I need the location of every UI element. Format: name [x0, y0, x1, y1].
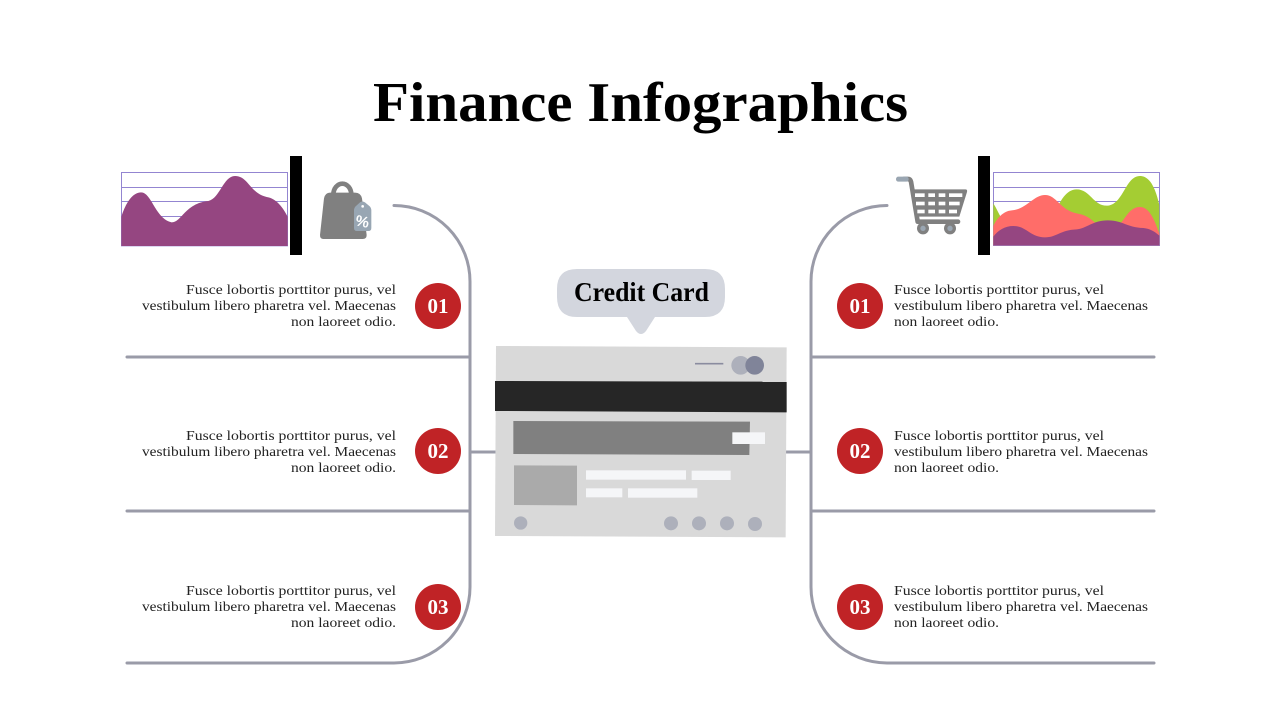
- right item 01 text: vestibulum libero pharetra vel. Maecenas: [894, 299, 1148, 314]
- title: Finance Infographics: [373, 72, 908, 134]
- left item 03 text: non laoreet odio.: [291, 616, 396, 631]
- right item 03 text: Fusce lobortis porttitor purus, vel: [894, 584, 1104, 599]
- right bracket connector: [786, 206, 1154, 663]
- right badge 02: [837, 428, 883, 474]
- left item 01 text: Fusce lobortis porttitor purus, vel: [186, 283, 396, 298]
- left item 02: [142, 428, 461, 476]
- right item 02 text: vestibulum libero pharetra vel. Maecenas: [894, 445, 1148, 460]
- icon: shopping bag with percent tag: [320, 184, 371, 239]
- left badge 03: [415, 584, 461, 630]
- right item 01: [837, 283, 1148, 330]
- right item 01 text: non laoreet odio.: [894, 315, 999, 330]
- right item 01 text: Fusce lobortis porttitor purus, vel: [894, 283, 1104, 298]
- right item 02 text: Fusce lobortis porttitor purus, vel: [894, 429, 1104, 444]
- callout: Credit Card speech bubble: Credit Card: [574, 277, 709, 307]
- card body: [495, 346, 787, 537]
- left item 02 text: Fusce lobortis porttitor purus, vel: [186, 429, 396, 444]
- signature strip: [513, 421, 750, 455]
- left area chart: [121, 172, 288, 246]
- left item 03 text: Fusce lobortis porttitor purus, vel: [186, 584, 396, 599]
- card network logo: [695, 356, 764, 375]
- illustration: credit card: [495, 346, 787, 537]
- icon: shopping cart: [896, 177, 967, 234]
- right badge 01: [837, 283, 883, 329]
- left item 01: [142, 283, 461, 330]
- left item 02 text: non laoreet odio.: [291, 461, 396, 476]
- left item 03 text: [142, 584, 396, 631]
- left badge 02: [415, 428, 461, 474]
- right badge 01: 01: [850, 294, 870, 318]
- right badge 03: 03: [850, 595, 870, 619]
- security code box: [732, 432, 765, 444]
- left item 01 text: non laoreet odio.: [291, 315, 396, 330]
- left item 02 text: vestibulum libero pharetra vel. Maecenas: [142, 445, 396, 460]
- right item 03 text: [894, 584, 1148, 631]
- card footer dots: [514, 516, 762, 531]
- left item 01 text: [142, 283, 396, 330]
- left item 01 text: vestibulum libero pharetra vel. Maecenas: [142, 299, 396, 314]
- right item 02: [837, 428, 1148, 476]
- left item 03 text: vestibulum libero pharetra vel. Maecenas: [142, 600, 396, 615]
- callout: Credit Card speech bubble: [557, 269, 725, 334]
- right area chart: [993, 172, 1159, 245]
- right item 02 text: [894, 429, 1148, 476]
- card chip block: [514, 465, 577, 505]
- right item 03 text: non laoreet odio.: [894, 616, 999, 631]
- right item 03: [837, 584, 1148, 631]
- left black bar: [290, 156, 302, 255]
- left badge 01: 01: [428, 294, 448, 318]
- card detail lines: [586, 470, 731, 498]
- right badge 02: 02: [850, 439, 870, 463]
- right item 01 text: [894, 283, 1148, 330]
- magnetic stripe: [495, 381, 787, 412]
- left badge 01: [415, 283, 461, 329]
- left item 02 text: [142, 429, 396, 476]
- right item 03 text: vestibulum libero pharetra vel. Maecenas: [894, 600, 1148, 615]
- icon: shopping bag with percent tag: %: [354, 212, 371, 232]
- right badge 03: [837, 584, 883, 630]
- left item 03: [142, 584, 461, 631]
- right black bar: [978, 156, 990, 255]
- left badge 02: 02: [428, 439, 448, 463]
- right item 02 text: non laoreet odio.: [894, 461, 999, 476]
- left badge 03: 03: [428, 595, 448, 619]
- left bracket connector: [127, 206, 496, 663]
